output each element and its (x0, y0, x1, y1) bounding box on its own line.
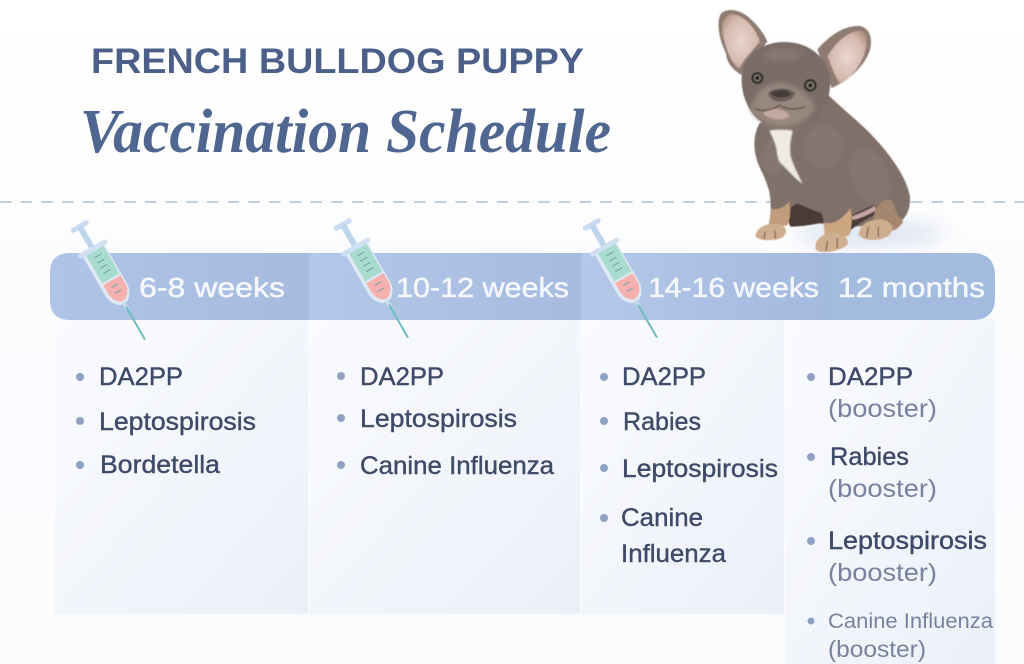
list: 12 months: (booster) (828, 475, 937, 503)
list: 12 months: Leptospirosis (828, 527, 987, 555)
list: 12 months: (booster) (828, 559, 937, 587)
label: 12 months: 12 months (838, 272, 985, 303)
list: 10-12 weeks: DA2PP (360, 363, 444, 391)
list: 12 months: Canine Influenza (828, 610, 993, 633)
muzzle (750, 83, 815, 127)
dashed divider (0, 201, 1024, 203)
list: 10-12 weeks: Leptospirosis (360, 405, 517, 433)
list: 14-16 weeks: Influenza (621, 540, 726, 568)
list: 6-8 weeks: DA2PP (99, 363, 183, 391)
icon: syringe 2 (327, 214, 422, 346)
panel: 14-16 weeks column (581, 318, 784, 614)
list: 6-8 weeks (76, 363, 256, 479)
icon: syringe 1 (64, 216, 159, 348)
body silhouette (754, 95, 910, 233)
list: 10-12 weeks (337, 363, 554, 480)
panel: 10-12 weeks column (309, 318, 580, 614)
shoulder highlight (803, 125, 843, 168)
head (742, 42, 830, 128)
shadow under belly (788, 203, 824, 227)
list: 6-8 weeks: Leptospirosis (99, 408, 256, 436)
belly pink (852, 206, 877, 220)
heading: Vaccination Schedule: Vaccination Schedule (80, 98, 611, 166)
white chest (769, 130, 803, 184)
list: 14-16 weeks: DA2PP (622, 363, 706, 391)
paws (755, 224, 786, 240)
title (80, 42, 611, 166)
list: 12 months: Rabies (830, 443, 909, 471)
icon: syringe 3 (576, 214, 671, 346)
eyes (751, 72, 763, 84)
list: 14-16 weeks: Canine (621, 504, 703, 532)
list: 10-12 weeks: Canine Influenza (360, 452, 554, 480)
panel: 12 months column (785, 318, 995, 664)
label: 10-12 weeks: 10-12 weeks (396, 272, 569, 303)
list: 12 months: (booster) (828, 395, 937, 423)
header bar (50, 253, 995, 320)
left ear (718, 10, 767, 75)
list: 14-16 weeks: Leptospirosis (622, 455, 778, 483)
list: 6-8 weeks: Bordetella (100, 451, 220, 479)
heading: French Bulldog Puppy: FRENCH BULLDOG PUPPY (91, 42, 584, 81)
right ear (817, 26, 871, 88)
illustration: french bulldog puppy (718, 10, 910, 252)
brow shade (765, 48, 802, 62)
list: 12 months: DA2PP (828, 363, 913, 391)
list: 14-16 weeks: Rabies (623, 408, 701, 436)
front right leg (821, 163, 851, 237)
list: 12 months (807, 363, 993, 662)
list: 14-16 weeks (600, 363, 778, 568)
tan hind leg (873, 199, 903, 231)
puppy shadow (795, 222, 945, 246)
panel: 6-8 weeks column (55, 318, 308, 614)
list: 12 months: (booster) (828, 636, 926, 662)
haunch highlight (843, 144, 897, 210)
front left leg (763, 175, 790, 227)
label: 6-8 weeks: 6-8 weeks (139, 272, 285, 303)
label: 14-16 weeks: 14-16 weeks (648, 272, 819, 303)
